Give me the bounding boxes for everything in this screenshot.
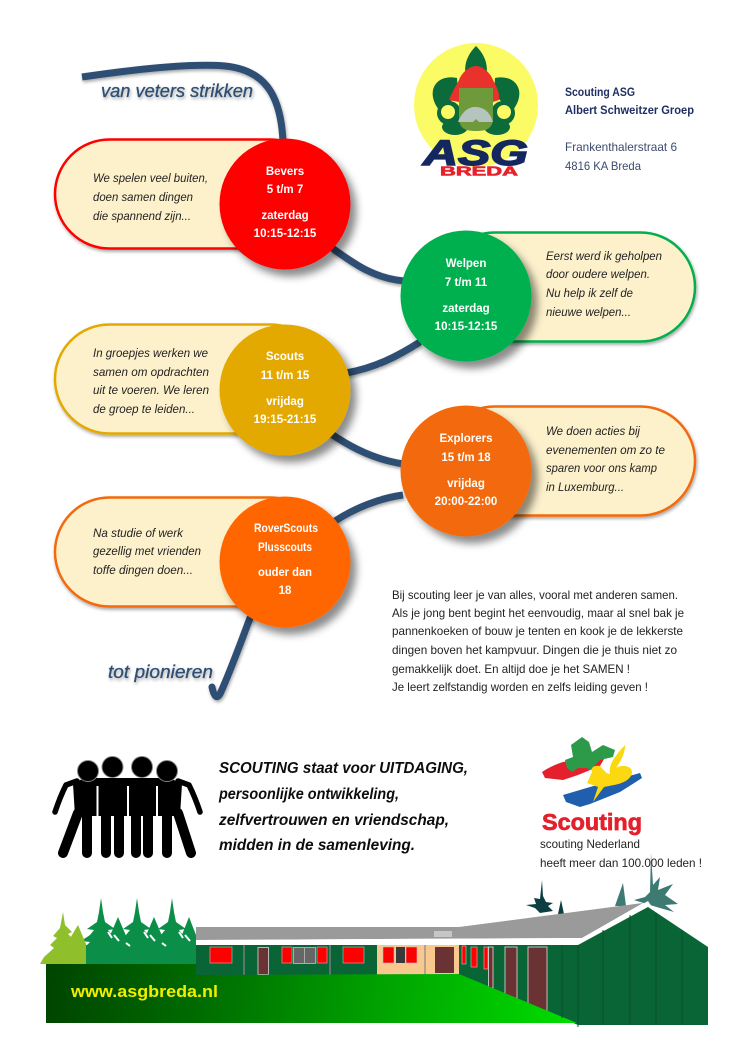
text block: about scouting: gemakkelijk doet. En altijd doe je het SAMEN !: [392, 662, 630, 676]
Welpen description text: door oudere welpen.: [546, 267, 650, 281]
Welpen description text: Eerst werd ik geholpen: [546, 249, 662, 263]
Scouts description text: [93, 346, 209, 416]
RoverScouts description text: toffe dingen doen...: [93, 563, 193, 577]
gaps between figures: [98, 786, 157, 856]
Welpen circle: [400, 230, 532, 362]
Explorers circle: [400, 406, 532, 536]
RoverScouts circle text: [254, 523, 318, 597]
Bevers circle text: [254, 166, 317, 240]
Scouts circle text: vrijdag: [266, 396, 304, 408]
front doors: [258, 947, 454, 974]
text block: about scouting: Je leert zelfstandig worden en zelfs leiding geven !: [392, 680, 648, 694]
organisation name: Albert Schweitzer Groep: [565, 103, 694, 117]
RoverScouts description text: gezellig met vrienden: [93, 544, 201, 558]
text block: slogan: persoonlijke ontwikkeling,: [218, 786, 399, 803]
Bevers description text: We spelen veel buiten,: [93, 171, 208, 185]
text block: slogan: midden in de samenleving.: [219, 837, 415, 854]
white fir highlights: [108, 932, 190, 946]
text block: about scouting: Als je jong bent begint het eenvoudig, maar al snel bak je: [392, 606, 684, 620]
legs: [63, 813, 191, 853]
logo yellow lily: [587, 745, 632, 802]
logo green fleur-de-lis: [433, 46, 519, 135]
text block: about scouting: dingen boven het kampvuur. Dingen die je thuis niet zo: [392, 643, 677, 657]
panel: Welpen: [400, 230, 695, 362]
logo red hat: [449, 66, 499, 102]
Scouts description text: de groep te leiden...: [93, 402, 195, 416]
panel: Bevers: [55, 138, 350, 270]
roof vent: [434, 931, 452, 937]
logo: ASG Breda: [414, 43, 538, 178]
organisation name: [565, 85, 694, 117]
Scouts circle text: [254, 351, 317, 426]
street address: Frankenthalerstraat 6: [565, 140, 677, 154]
icon: group of four friends: [55, 756, 200, 856]
text block: about scouting: Bij scouting leer je van alles, vooral met anderen samen.: [392, 588, 678, 602]
RoverScouts circle text: 18: [279, 585, 292, 597]
side wing wall: [459, 945, 582, 1025]
RoverScouts circle text: ouder dan: [258, 567, 312, 579]
logo: Scouting Nederland: [542, 737, 642, 835]
Scouts description pill: [55, 324, 325, 434]
Scouts description text: uit te voeren. We leren: [93, 383, 209, 397]
long roof: [196, 903, 643, 940]
text block: scouting Nederland: scouting Nederland: [540, 837, 640, 851]
torsos: [73, 778, 182, 816]
logo yellow cutouts: [441, 105, 455, 119]
Scouts description text: In groepjes werken we: [93, 346, 208, 360]
Scouts circle text: 19:15-21:15: [254, 414, 317, 426]
Explorers description text: [546, 424, 665, 494]
RoverScouts description pill: [55, 498, 325, 606]
Explorers description text: We doen acties bij: [546, 424, 640, 438]
Explorers circle text: 15 t/m 18: [441, 452, 491, 464]
logo red stripe: [542, 752, 608, 780]
Scouts circle: [220, 324, 350, 456]
Scouts circle text: 11 t/m 15: [261, 370, 310, 382]
logo wordmark Scouting: Scouting: [542, 809, 642, 835]
text block: about scouting: [392, 588, 684, 694]
white gutter: [196, 901, 652, 945]
Explorers circle text: Explorers: [439, 433, 493, 445]
gable boards: [562, 913, 682, 1027]
background firs behind roof: [526, 853, 678, 914]
RoverScouts circle text: Plusscouts: [258, 542, 312, 554]
Bevers circle text: 5 t/m 7: [267, 184, 303, 196]
Welpen circle text: [435, 258, 498, 333]
Bevers description text: [93, 171, 208, 223]
address block: [565, 85, 694, 173]
heading: tot pionieren: tot pionieren: [108, 661, 213, 682]
RoverScouts circle: [220, 496, 350, 628]
logo text ASG: ASG: [422, 134, 528, 173]
Explorers description text: in Luxemburg...: [546, 480, 624, 494]
gable: [578, 907, 708, 1025]
panel: Explorers: [400, 406, 695, 536]
RoverScouts description text: Na studie of werk: [93, 526, 184, 540]
front wall: [196, 945, 460, 975]
Welpen circle text: 10:15-12:15: [435, 321, 498, 333]
Welpen description text: Nu help ik zelf de: [546, 286, 633, 300]
street address: [565, 140, 677, 173]
Scouts circle text: Scouts: [266, 351, 304, 363]
side wing windows: [462, 946, 488, 969]
Bevers circle: [220, 138, 350, 270]
illustration: scout building: [40, 853, 708, 1027]
Explorers description text: evenementen om zo te: [546, 443, 665, 457]
Explorers description pill: [440, 406, 695, 516]
text block: scouting Nederland: [540, 837, 702, 870]
light green firs: [40, 912, 86, 964]
text block: slogan: zelfvertrouwen en vriendschap,: [218, 812, 449, 829]
text block: about scouting: pannenkoeken of bouw je tenten en kook je de lekkerste: [392, 624, 683, 638]
Bevers description text: die spannend zijn...: [93, 209, 191, 223]
front windows: [210, 947, 417, 963]
heading: van veters strikken: van veters strikken: [101, 80, 253, 101]
Bevers circle text: Bevers: [266, 166, 304, 178]
Bevers circle text: zaterdag: [261, 210, 309, 222]
Welpen circle text: 7 t/m 11: [445, 277, 488, 289]
dark green firs: [74, 898, 199, 983]
panel: RoverScouts: [55, 496, 350, 628]
connector line: snake through the age groups: [82, 65, 420, 697]
tan section: [377, 945, 460, 975]
logo pale beard: [458, 107, 493, 122]
lawn: [46, 964, 577, 1023]
text block: scouting Nederland: heeft meer dan 100.000 leden !: [540, 856, 702, 870]
RoverScouts description text: [93, 526, 201, 577]
Welpen circle text: Welpen: [446, 258, 486, 270]
logo blue stripe: [563, 773, 642, 807]
Welpen circle text: zaterdag: [442, 303, 490, 315]
Explorers circle text: vrijdag: [447, 478, 485, 490]
Welpen description text: [546, 249, 662, 319]
website url: www.asgbreda.nl: [70, 982, 218, 1001]
organisation name: Scouting ASG: [565, 85, 635, 99]
grey window panes: [294, 947, 405, 964]
text block: slogan: SCOUTING staat voor UITDAGING,: [219, 760, 468, 777]
RoverScouts circle text: RoverScouts: [254, 523, 318, 535]
logo yellow disc: [414, 43, 538, 167]
text block: slogan: [218, 760, 468, 854]
Explorers circle text: [435, 433, 497, 508]
wall dividers: [244, 945, 425, 975]
street address: 4816 KA Breda: [565, 159, 641, 173]
side wing doors: [488, 947, 547, 1012]
logo olive head: [459, 88, 493, 131]
Explorers circle text: 20:00-22:00: [435, 496, 497, 508]
outer arms: [55, 781, 200, 812]
Explorers description text: sparen voor ons kamp: [546, 461, 657, 475]
Scouts description text: samen om opdrachten: [93, 365, 209, 379]
Welpen description pill: [440, 232, 695, 342]
logo green leaf: [565, 737, 615, 772]
Bevers description text: doen samen dingen: [93, 190, 193, 204]
Bevers circle text: 10:15-12:15: [254, 228, 317, 240]
heads: [78, 756, 178, 782]
Welpen description text: nieuwe welpen...: [546, 305, 631, 319]
Bevers description pill: [55, 140, 325, 248]
logo text BREDA: BREDA: [440, 164, 518, 178]
panel: Scouts: [55, 324, 350, 456]
